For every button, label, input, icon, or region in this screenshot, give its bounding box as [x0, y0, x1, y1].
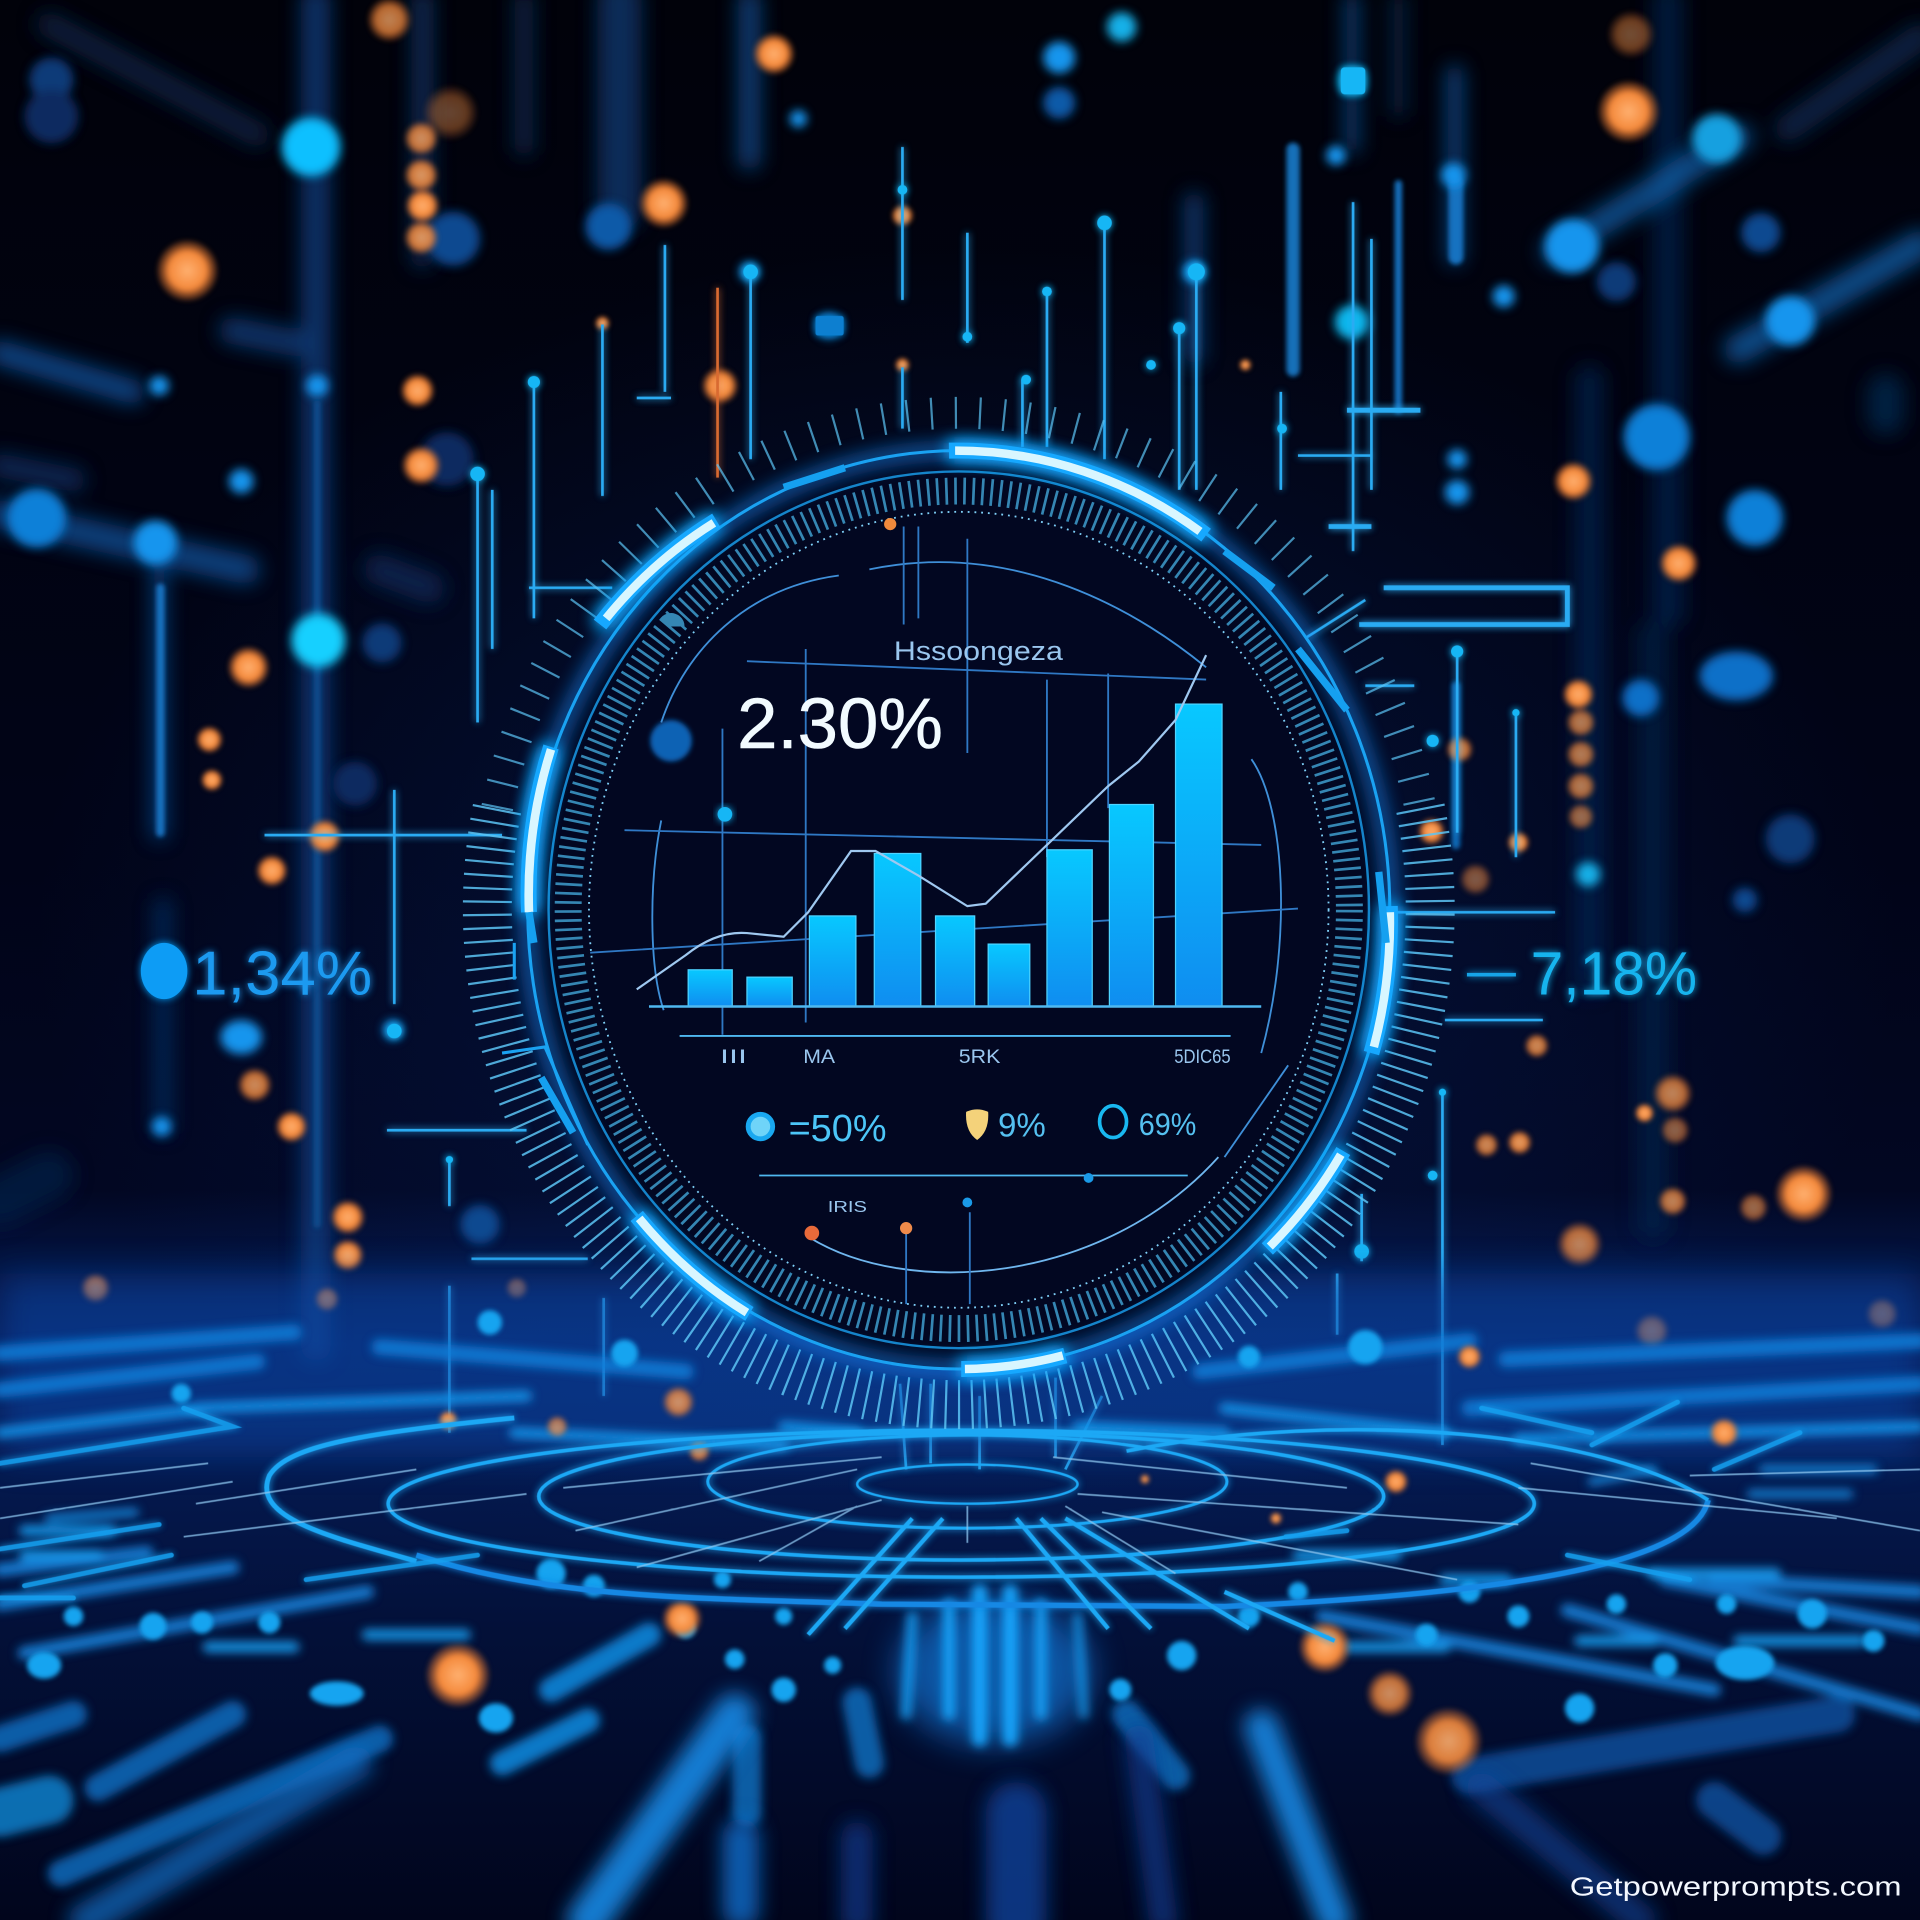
- floor: radial and circuit thin lines: [0, 1457, 1920, 1580]
- stat: 69%: 69%: [1139, 1106, 1196, 1142]
- left stat: 1,34%: 1,34%: [192, 938, 372, 1008]
- chart axis labels: 5DIC65: [1174, 1046, 1231, 1068]
- chart grid lines: [590, 527, 1298, 1304]
- chart title: Hssoongeza: [894, 636, 1063, 666]
- chart axis labels: 5RK: [959, 1046, 1000, 1068]
- ring inner tick band: [568, 491, 1349, 1329]
- chart: trend line: [637, 655, 1206, 989]
- ring outer tick marks: [487, 413, 1430, 1405]
- watermark: Getpowerprompts.com: [1570, 1874, 1902, 1902]
- inner chart node: [718, 807, 732, 822]
- stat: 9%: 9%: [998, 1107, 1046, 1144]
- floor: concentric circuit rings: [267, 1418, 1708, 1641]
- chart axis labels: IRIS: [828, 1199, 867, 1216]
- floor long streaks: [86, 1714, 1641, 1920]
- chart: baseline axes: [649, 1007, 1261, 1176]
- stat: 9%: [966, 1107, 1046, 1144]
- right stat: 7,18%: 7,18%: [1531, 939, 1697, 1007]
- chart axis labels: III: [720, 1046, 747, 1068]
- chart axis labels: MA: [803, 1046, 836, 1068]
- inner chart frame arcs: [652, 562, 1288, 1272]
- floor: left and right circuit traces: [0, 1402, 1800, 1598]
- small inner markers: [804, 518, 1093, 1240]
- floor orange lights: [426, 1344, 1739, 1774]
- main percentage: 2.30%: [737, 685, 943, 764]
- inner blurred blue blob: [650, 720, 692, 762]
- chart axis labels: [720, 1046, 1231, 1216]
- floor central glow: [896, 1598, 1092, 1745]
- thin data lines rising from the ring: [264, 147, 1567, 1469]
- floor light dots: [27, 1310, 1884, 1733]
- ring notched bracket: [502, 943, 588, 1145]
- data line end nodes: [387, 67, 1520, 1259]
- orange bokeh lights: [81, 0, 1898, 1348]
- chart: bars: [688, 704, 1222, 1007]
- ring dark face: [528, 451, 1390, 1369]
- blurred background columns and diagonal bars: [0, 0, 1920, 1347]
- floor: blurred circuit blocks: [0, 1332, 1920, 1873]
- centre haze: [37, 245, 1898, 1616]
- stat: 69%: [1100, 1106, 1196, 1142]
- floor light beams: [906, 1592, 1084, 1739]
- ring outer glow: [528, 451, 1390, 1369]
- floor haze band: [0, 1273, 1920, 1457]
- ring strokes: [528, 451, 1390, 1369]
- stat: 50%: =50%: [789, 1108, 887, 1150]
- ring bright arc segments: [529, 451, 1390, 1369]
- sharper blue column segments: [160, 149, 1456, 1224]
- central HUD ring gauge: [487, 413, 1430, 1405]
- blue bokeh lights: [7, 12, 1815, 1244]
